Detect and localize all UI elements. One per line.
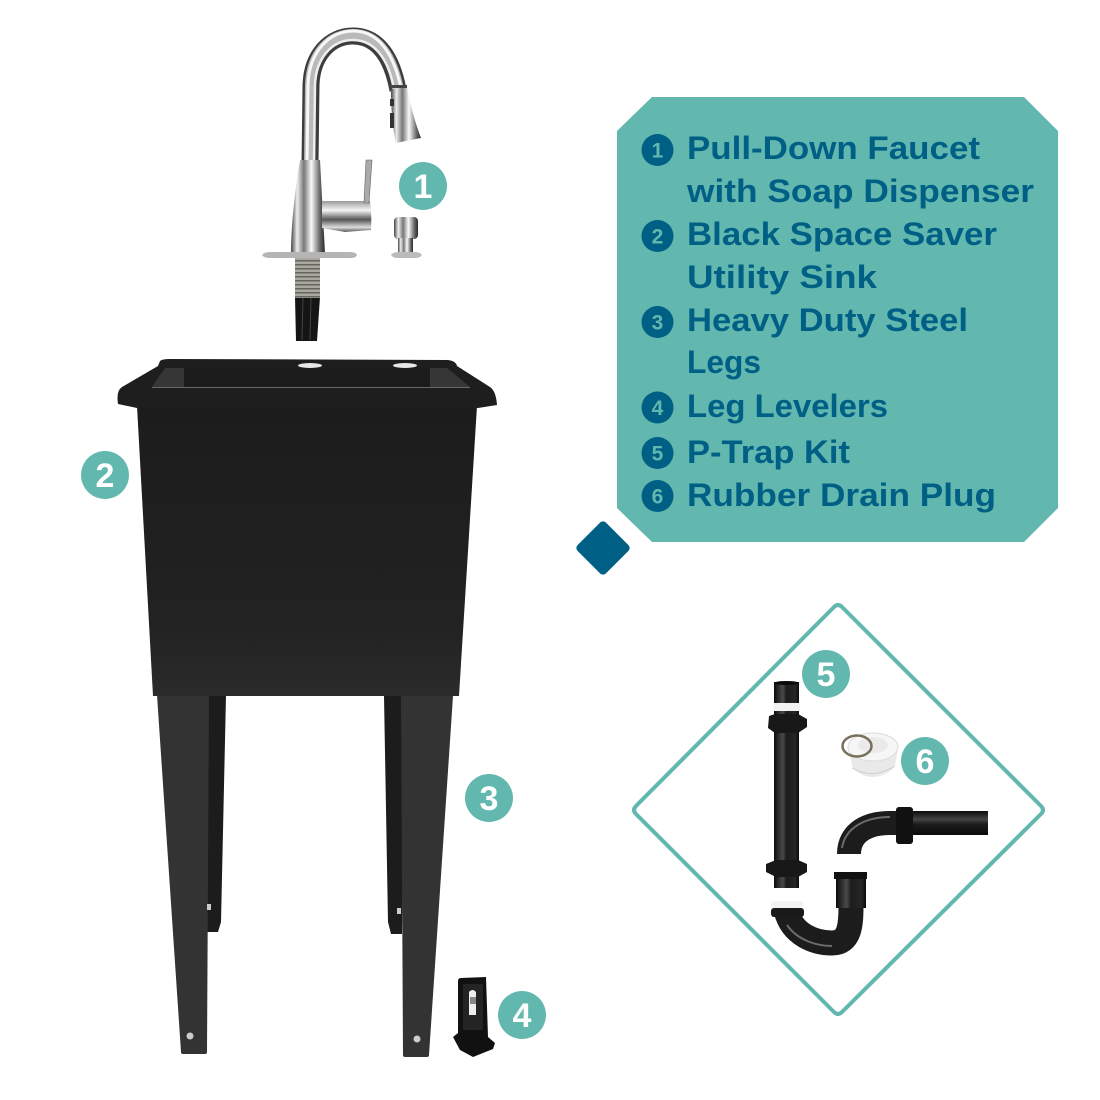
sink rim	[118, 359, 497, 408]
number badge 3	[465, 774, 513, 822]
faucet hoses	[295, 297, 320, 341]
list item 1: 1	[652, 140, 664, 162]
list item 6: Rubber Drain Plug	[687, 477, 996, 513]
number badge 5	[802, 650, 850, 698]
p-trap u-bend	[771, 872, 867, 946]
list item 4: Leg Levelers	[687, 388, 888, 424]
number badge 2: 2	[96, 457, 114, 495]
sink tub	[137, 406, 477, 696]
number badge 6: 6	[916, 743, 934, 781]
back right leg	[384, 696, 405, 934]
lower slip nut	[766, 860, 807, 877]
list item 1	[642, 130, 1034, 209]
list item 3: Heavy Duty Steel	[687, 302, 968, 338]
diamond outline frame	[634, 605, 1043, 1014]
list item 3: Legs	[687, 344, 761, 380]
list item 6: 6	[652, 486, 663, 508]
list item 2: Utility Sink	[687, 259, 877, 295]
p-trap elbow	[842, 807, 988, 854]
list item 3: 3	[652, 312, 663, 334]
small navy diamond	[575, 520, 631, 576]
number badge 1: 1	[414, 168, 432, 206]
number badge 2	[81, 451, 129, 499]
faucet lever	[364, 160, 372, 203]
back left leg	[205, 695, 226, 932]
front right leg	[401, 696, 453, 1057]
front left leg	[157, 695, 209, 1054]
number badge 5: 5	[817, 656, 835, 694]
list item 3	[642, 302, 968, 380]
list item 5: P-Trap Kit	[687, 434, 850, 470]
p-trap tailpiece	[766, 681, 807, 888]
list item 5: 5	[652, 442, 664, 466]
sink with legs	[118, 359, 497, 1057]
list item 2	[642, 216, 997, 295]
list item 4: 4	[652, 397, 664, 420]
leg bolts	[186, 904, 420, 1042]
faucet	[262, 31, 421, 341]
faucet threaded shank	[295, 257, 320, 298]
faucet barrel	[322, 201, 371, 232]
faucet spray head	[390, 85, 421, 143]
list item 2: 2	[652, 226, 663, 248]
leg leveler part	[453, 977, 495, 1057]
number badge 6	[901, 737, 949, 785]
soap dispenser	[391, 217, 422, 258]
faucet base plate	[262, 252, 357, 258]
number badge 3: 3	[480, 780, 498, 818]
rim highlight line	[152, 386, 470, 388]
list item 1: Pull-Down Faucet	[687, 130, 980, 166]
upper slip nut	[768, 714, 807, 733]
list item 1: with Soap Dispenser	[686, 173, 1034, 209]
faucet holes	[298, 363, 417, 368]
sink basin interior	[152, 368, 470, 387]
faucet spout	[307, 31, 401, 165]
number badge 1	[399, 162, 447, 210]
faucet body	[291, 160, 325, 253]
rubber drain plug	[842, 733, 898, 777]
list item 2: Black Space Saver	[687, 216, 997, 252]
number badge 4	[498, 991, 546, 1039]
number badge 4: 4	[513, 997, 532, 1035]
panel: parts list	[617, 97, 1058, 542]
